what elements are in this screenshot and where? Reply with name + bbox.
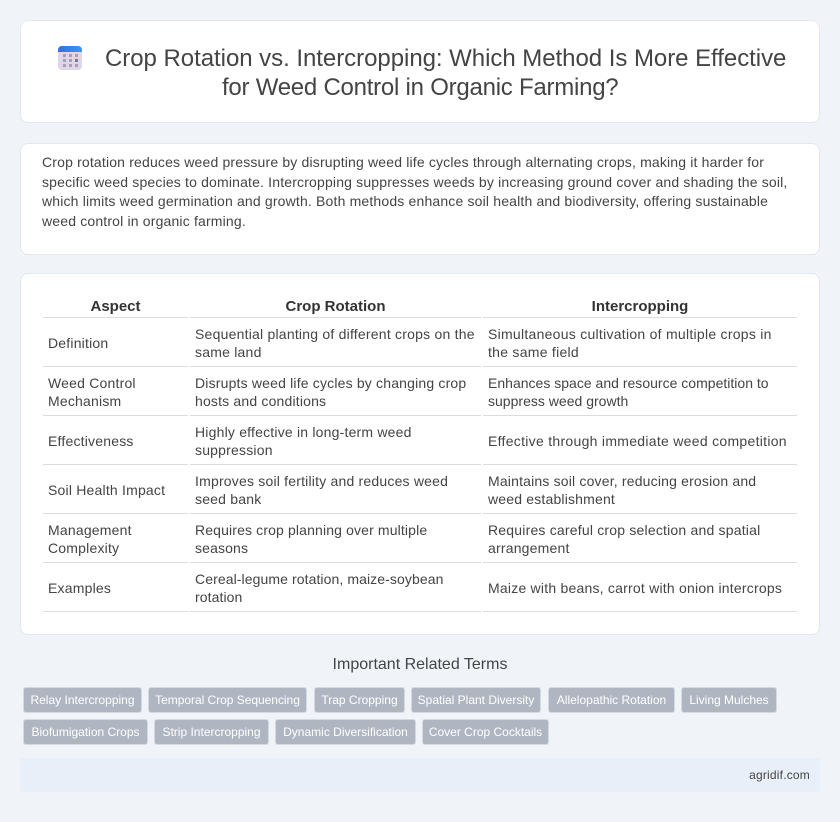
tag: Allelopathic Rotation bbox=[557, 693, 666, 707]
table header: Aspect bbox=[90, 298, 141, 315]
row: examples: Cereal-legume rotation, maize-soybean bbox=[195, 571, 443, 587]
row: effectiveness: Effectiveness bbox=[48, 433, 134, 449]
row: effectiveness: suppression bbox=[195, 442, 273, 458]
text block: summary: which limits weed germination and growth. Both methods enhance soil health and biodiversity, offering sustainable bbox=[42, 193, 768, 209]
tag bbox=[548, 687, 675, 713]
row: definition: Simultaneous cultivation of multiple crops in bbox=[488, 326, 772, 342]
row: effectiveness: Effective through immediate weed competition bbox=[488, 433, 787, 449]
row: examples: rotation bbox=[195, 589, 242, 605]
text block: summary: Crop rotation reduces weed pressure by disrupting weed life cycles through alternating crops, making it harder for bbox=[42, 154, 764, 170]
tag: Spatial Plant Diversity bbox=[418, 693, 534, 707]
tag: Temporal Crop Sequencing bbox=[155, 693, 300, 707]
row: effectiveness bbox=[48, 424, 787, 458]
row: management complexity: seasons bbox=[195, 540, 248, 556]
tag: Living Mulches bbox=[689, 693, 769, 707]
tag: Relay Intercropping bbox=[30, 693, 135, 707]
row: weed control mechanism: Disrupts weed life cycles by changing crop bbox=[195, 375, 466, 391]
row: soil health impact: Maintains soil cover, reducing erosion and bbox=[488, 473, 756, 489]
row: soil health impact bbox=[48, 473, 756, 507]
row: management complexity: Requires careful crop selection and spatial bbox=[488, 522, 760, 538]
row: weed control mechanism bbox=[48, 375, 769, 409]
row: weed control mechanism: hosts and conditions bbox=[195, 393, 326, 409]
tag: Dynamic Diversification bbox=[283, 725, 408, 739]
row: definition: Sequential planting of different crops on the bbox=[195, 326, 475, 342]
tag bbox=[314, 687, 405, 713]
tag bbox=[23, 687, 142, 713]
row: soil health impact: seed bank bbox=[195, 491, 261, 507]
text block: summary: specific weed species to dominate. Intercropping suppresses weeds by increasing ground cover and shading the soil, bbox=[42, 174, 787, 190]
title: for Weed Control in Organic Farming? bbox=[222, 74, 618, 101]
tag bbox=[23, 719, 148, 745]
tag bbox=[148, 687, 307, 713]
tag: Strip Intercropping bbox=[162, 725, 261, 739]
row: management complexity: arrangement bbox=[488, 540, 570, 556]
row: management complexity bbox=[48, 522, 760, 556]
row: weed control mechanism: Weed Control bbox=[48, 375, 136, 391]
text block: summary: weed control in organic farming. bbox=[42, 213, 246, 229]
table header: Intercropping bbox=[592, 298, 688, 315]
tag bbox=[275, 719, 416, 745]
row: management complexity: Requires crop planning over multiple bbox=[195, 522, 427, 538]
text block: summary bbox=[42, 154, 787, 229]
tag bbox=[411, 687, 541, 713]
row: definition bbox=[48, 326, 772, 360]
tag: Cover Crop Cocktails bbox=[429, 725, 542, 739]
row: management complexity: Complexity bbox=[48, 540, 119, 556]
icon: calendar bbox=[58, 46, 82, 70]
tag list: related terms bbox=[23, 687, 777, 745]
row: weed control mechanism: Mechanism bbox=[48, 393, 121, 409]
panel: header bbox=[20, 20, 820, 123]
row: examples: Examples bbox=[48, 580, 111, 596]
row: soil health impact: Soil Health Impact bbox=[48, 482, 165, 498]
tag bbox=[154, 719, 269, 745]
heading: related terms: Important Related Terms bbox=[333, 656, 507, 673]
tag: Trap Cropping bbox=[321, 693, 398, 707]
panel: introduction bbox=[20, 143, 820, 255]
tag bbox=[422, 719, 549, 745]
tag: Biofumigation Crops bbox=[31, 725, 140, 739]
footer source: agridif.com bbox=[749, 768, 810, 782]
row: weed control mechanism: suppress weed growth bbox=[488, 393, 628, 409]
table header bbox=[90, 298, 688, 315]
row: management complexity: Management bbox=[48, 522, 132, 538]
title bbox=[105, 45, 786, 101]
row: definition: Definition bbox=[48, 335, 108, 351]
table header: Crop Rotation bbox=[286, 298, 385, 315]
tag bbox=[681, 687, 777, 713]
row: examples: Maize with beans, carrot with onion intercrops bbox=[488, 580, 782, 596]
footer bbox=[20, 758, 820, 792]
row: examples bbox=[48, 571, 782, 605]
panel: comparison table bbox=[20, 273, 820, 635]
title: Crop Rotation vs. Intercropping: Which Method Is More Effective bbox=[105, 45, 786, 72]
row: soil health impact: weed establishment bbox=[488, 491, 615, 507]
row: definition: the same field bbox=[488, 344, 579, 360]
row: soil health impact: Improves soil fertility and reduces weed bbox=[195, 473, 448, 489]
row: definition: same land bbox=[195, 344, 262, 360]
row: weed control mechanism: Enhances space and resource competition to bbox=[488, 375, 769, 391]
row: effectiveness: Highly effective in long-term weed bbox=[195, 424, 412, 440]
